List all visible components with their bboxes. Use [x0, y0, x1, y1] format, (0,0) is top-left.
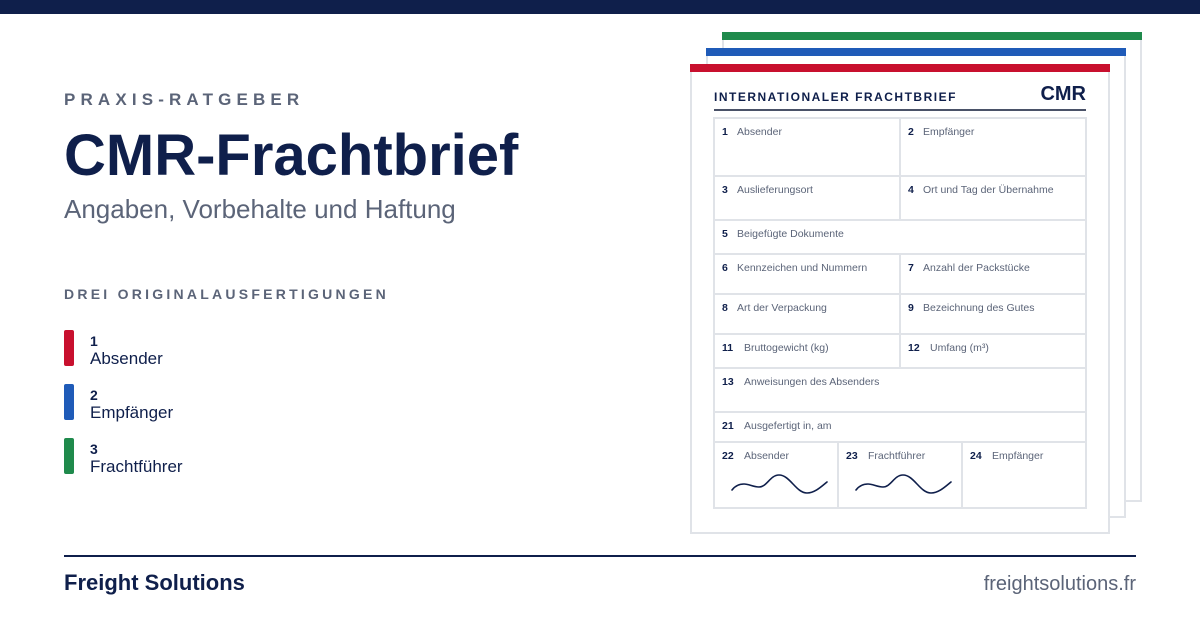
field 24: Empfänger [992, 450, 1043, 462]
field 11 [713, 333, 901, 369]
field 6: Kennzeichen und Nummern [737, 262, 867, 274]
field 21: 21 [722, 420, 734, 432]
field 5 [713, 219, 1087, 255]
field 13 [713, 367, 1087, 413]
field 22 with signature: Absender [744, 450, 789, 462]
field 3 [713, 175, 901, 221]
footer brand: Freight Solutions [64, 570, 245, 595]
field 11: Bruttogewicht (kg) [744, 342, 829, 354]
field 1: Absender [737, 126, 782, 138]
field 8: Art der Verpackung [737, 302, 827, 314]
field 4: Ort und Tag der Übernahme [923, 184, 1054, 196]
legend item 3: 3 [90, 441, 98, 457]
legend [64, 330, 183, 476]
field 21: Ausgefertigt in, am [744, 420, 832, 432]
field 7: 7 [908, 262, 914, 274]
legend item 1: 1 [90, 333, 98, 349]
field 22 with signature [713, 441, 839, 509]
legend item 2: Empfänger [90, 403, 173, 422]
swatch: blue [64, 384, 74, 420]
legend item 1 [90, 333, 163, 368]
CMR mark: CMR [1040, 83, 1086, 105]
field 22 with signature: 22 [722, 450, 734, 462]
eyebrow heading: PRAXIS-RATGEBER [64, 90, 304, 109]
legend item 2: 2 [90, 387, 98, 403]
field 23 with signature [837, 441, 963, 509]
field 2: Empfänger [923, 126, 974, 138]
legend item 1: Absender [90, 349, 163, 368]
field 21 [713, 411, 1087, 443]
field 5: 5 [722, 228, 728, 240]
footer rule [64, 555, 1136, 557]
legend item 2 [90, 387, 173, 422]
field 9 [899, 293, 1087, 335]
field 23 with signature: Frachtführer [868, 450, 925, 462]
field 13: 13 [722, 376, 734, 388]
section heading: DREI ORIGINALAUSFERTIGUNGEN [64, 286, 389, 302]
field 3: 3 [722, 184, 728, 196]
field 1: 1 [722, 126, 728, 138]
field 7 [899, 253, 1087, 295]
field 3: Auslieferungsort [737, 184, 813, 196]
field 2: 2 [908, 126, 914, 138]
field 24 [961, 441, 1087, 509]
sheet: red copy, form [690, 64, 1110, 534]
field 5: Beigefügte Dokumente [737, 228, 844, 240]
field 8 [713, 293, 901, 335]
field 6 [713, 253, 901, 295]
field 12: 12 [908, 342, 920, 354]
field 9: Bezeichnung des Gutes [923, 302, 1034, 314]
sheet: blue copy [706, 48, 1126, 518]
field 2 [899, 117, 1087, 177]
subtitle: Angaben, Vorbehalte und Haftung [64, 194, 456, 224]
footer url: freightsolutions.fr [984, 573, 1136, 595]
field 1 [713, 117, 901, 177]
form heading: INTERNATIONALER FRACHTBRIEF [714, 90, 957, 104]
field 8: 8 [722, 302, 728, 314]
field 6: 6 [722, 262, 728, 274]
title: CMR-Frachtbrief [64, 123, 518, 188]
field 12 [899, 333, 1087, 369]
field 12: Umfang (m³) [930, 342, 989, 354]
field 11: 11 [722, 342, 733, 354]
field 13: Anweisungen des Absenders [744, 376, 879, 388]
top band [0, 0, 1200, 14]
swatch: green [64, 438, 74, 474]
field 4: 4 [908, 184, 914, 196]
sheet: green copy [722, 32, 1142, 502]
field 7: Anzahl der Packstücke [923, 262, 1030, 274]
field 23 with signature: 23 [846, 450, 858, 462]
field 4 [899, 175, 1087, 221]
field 24: 24 [970, 450, 982, 462]
legend item 3 [90, 441, 183, 476]
swatch: red [64, 330, 74, 366]
field 9: 9 [908, 302, 914, 314]
legend item 3: Frachtführer [90, 457, 183, 476]
heading rule [714, 109, 1086, 111]
